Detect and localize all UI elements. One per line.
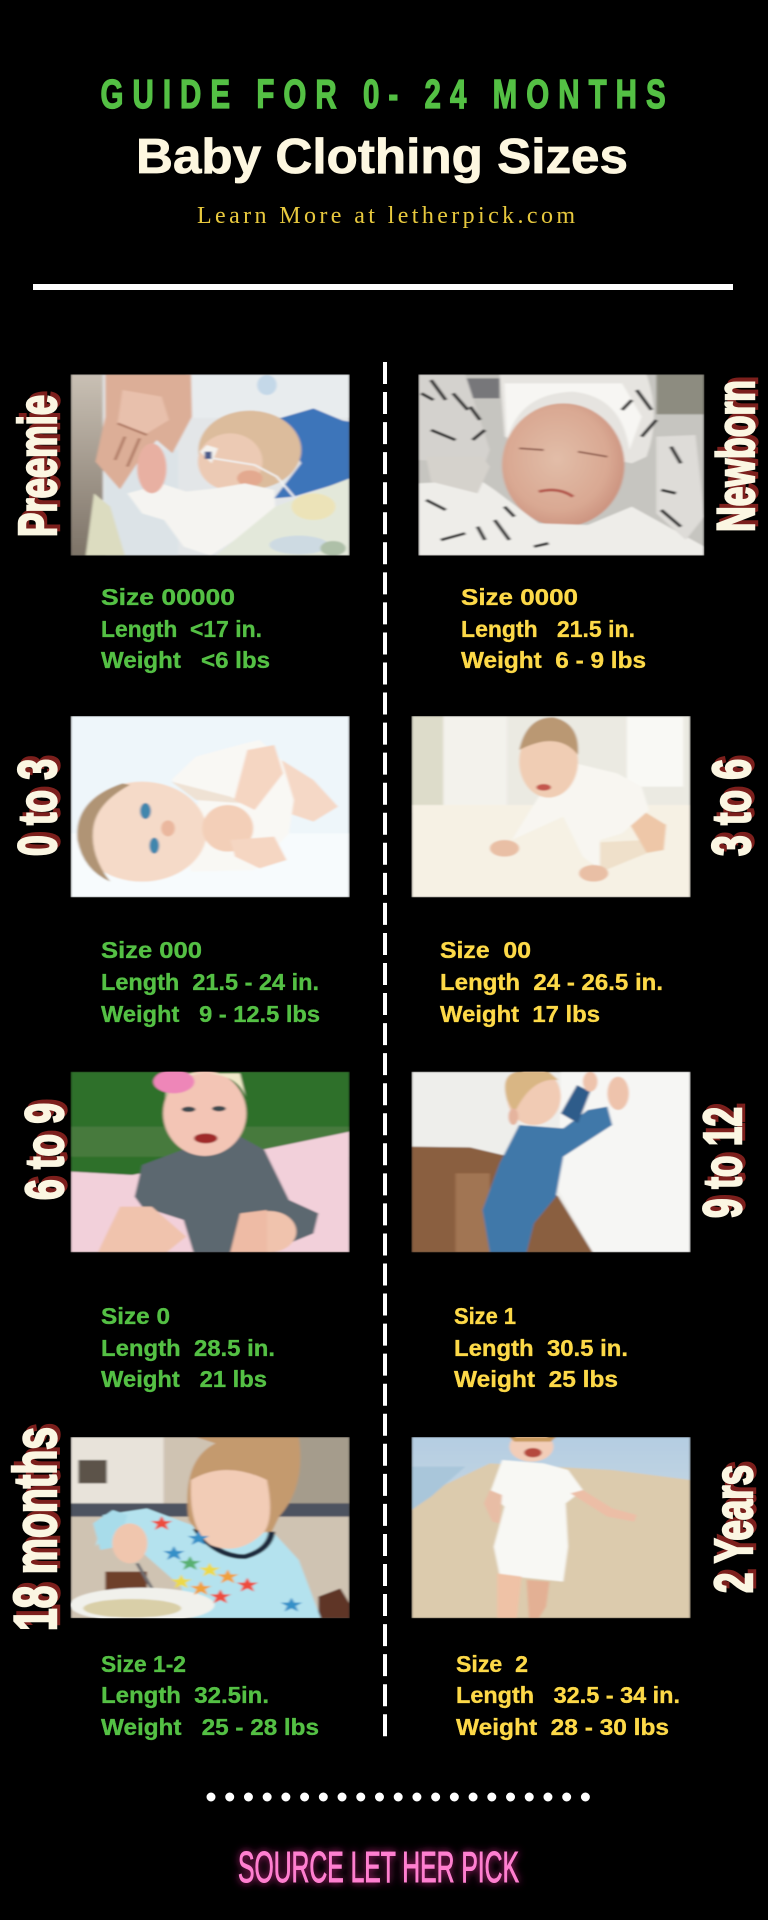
size details: Size 000 bbox=[101, 937, 202, 963]
photo: crawling baby bbox=[411, 716, 691, 897]
label: Newborn bbox=[707, 376, 768, 532]
size details bbox=[454, 1303, 628, 1392]
size details bbox=[461, 584, 646, 673]
size details: Size 00 bbox=[440, 937, 531, 963]
label: 18 months: 18 months bbox=[5, 1423, 72, 1627]
size details: Length 21.5 - 24 in. bbox=[101, 969, 319, 995]
label: 0 to 3 bbox=[8, 755, 71, 856]
size details: Length 32.5 - 34 in. bbox=[456, 1682, 680, 1708]
dashed centre line bbox=[383, 362, 387, 1737]
size details: Weight 17 lbs bbox=[440, 1001, 600, 1027]
size details: Size 2 bbox=[456, 1651, 528, 1677]
size details: Length 21.5 in. bbox=[461, 616, 635, 642]
title: Baby Clothing Sizes bbox=[136, 130, 628, 184]
label: 6 to 9: 6 to 9 bbox=[15, 1103, 75, 1200]
size details: Weight 25 - 28 lbs bbox=[101, 1714, 319, 1740]
size details: Weight 25 lbs bbox=[454, 1366, 618, 1392]
size details: Size 1-2 bbox=[101, 1651, 186, 1677]
photo: preemie baby bbox=[71, 374, 350, 556]
subtitle: Learn More at letherpick.com bbox=[197, 203, 575, 229]
panel: 18 months bbox=[2, 1423, 350, 1740]
size details: Weight 28 - 30 lbs bbox=[456, 1714, 669, 1740]
photo: baby lying down bbox=[71, 716, 350, 897]
label: 9 to 12: 9 to 12 bbox=[693, 1107, 753, 1218]
size details: Size 00000 bbox=[101, 584, 235, 610]
label: 2 Years: 2 Years bbox=[707, 1461, 767, 1589]
size details: Length 32.5in. bbox=[101, 1682, 269, 1708]
label: Preemie: Preemie bbox=[8, 395, 68, 537]
panel: Newborn bbox=[418, 374, 768, 673]
label: 3 to 6: 3 to 6 bbox=[702, 759, 762, 856]
size details: Weight 21 lbs bbox=[101, 1366, 267, 1392]
size details bbox=[456, 1651, 680, 1740]
size details: Length 30.5 in. bbox=[454, 1335, 628, 1361]
size details: Length 28.5 in. bbox=[101, 1335, 275, 1361]
size details bbox=[101, 1651, 319, 1740]
panel: Preemie bbox=[8, 374, 350, 673]
size details: Weight 9 - 12.5 lbs bbox=[101, 1001, 320, 1027]
label: 18 months bbox=[2, 1423, 72, 1631]
label: Newborn: Newborn bbox=[710, 376, 768, 528]
label: 6 to 9: 6 to 9 bbox=[18, 1099, 78, 1196]
label: 9 to 12: 9 to 12 bbox=[696, 1103, 756, 1214]
size details: Size 0000 bbox=[461, 584, 578, 610]
size details bbox=[101, 937, 320, 1027]
panel: 6 to 9 bbox=[15, 1070, 350, 1392]
header bbox=[100, 71, 666, 229]
label: Preemie: Preemie bbox=[11, 391, 71, 533]
divider line bbox=[33, 284, 733, 290]
size details: Length 24 - 26.5 in. bbox=[440, 969, 663, 995]
size details: Size 0 bbox=[101, 1303, 170, 1329]
panel: 3 to 6 bbox=[411, 716, 765, 1027]
photo: toddler running on beach bbox=[411, 1432, 691, 1618]
label: 6 to 9 bbox=[15, 1099, 78, 1200]
label: 0 to 3: 0 to 3 bbox=[8, 759, 68, 856]
photo: toddler eating bbox=[70, 1437, 350, 1622]
size details bbox=[440, 937, 663, 1027]
label: 18 months: 18 months bbox=[2, 1427, 69, 1631]
source credit: SOURCE LET HER PICK bbox=[238, 1843, 519, 1892]
label: 2 Years: 2 Years bbox=[704, 1465, 764, 1593]
label: 3 to 6: 3 to 6 bbox=[705, 755, 765, 852]
dotted separator bbox=[211, 1792, 586, 1802]
photo: newborn baby bbox=[418, 374, 704, 556]
size details: Weight <6 lbs bbox=[101, 647, 270, 673]
photo: sitting baby on blanket bbox=[71, 1070, 350, 1252]
heading: guide for 0-24 months: GUIDE FOR 0- 24 MONTHS bbox=[100, 71, 666, 117]
size details bbox=[101, 1303, 275, 1392]
label: 2 Years bbox=[704, 1461, 767, 1593]
panel: 2 Years bbox=[411, 1432, 767, 1740]
size details bbox=[101, 584, 270, 673]
size details: Length <17 in. bbox=[101, 616, 262, 642]
label: 9 to 12 bbox=[693, 1103, 756, 1218]
photo: baby standing at wall bbox=[411, 1068, 691, 1252]
panel: 0 to 3 bbox=[8, 716, 350, 1027]
panel: 9 to 12 bbox=[411, 1068, 756, 1392]
label: 3 to 6 bbox=[702, 755, 765, 856]
size details: Weight 6 - 9 lbs bbox=[461, 647, 646, 673]
label: 0 to 3: 0 to 3 bbox=[11, 755, 71, 852]
size details: Size 1 bbox=[454, 1303, 516, 1329]
label: Newborn: Newborn bbox=[707, 380, 766, 532]
label: Preemie bbox=[8, 391, 71, 537]
